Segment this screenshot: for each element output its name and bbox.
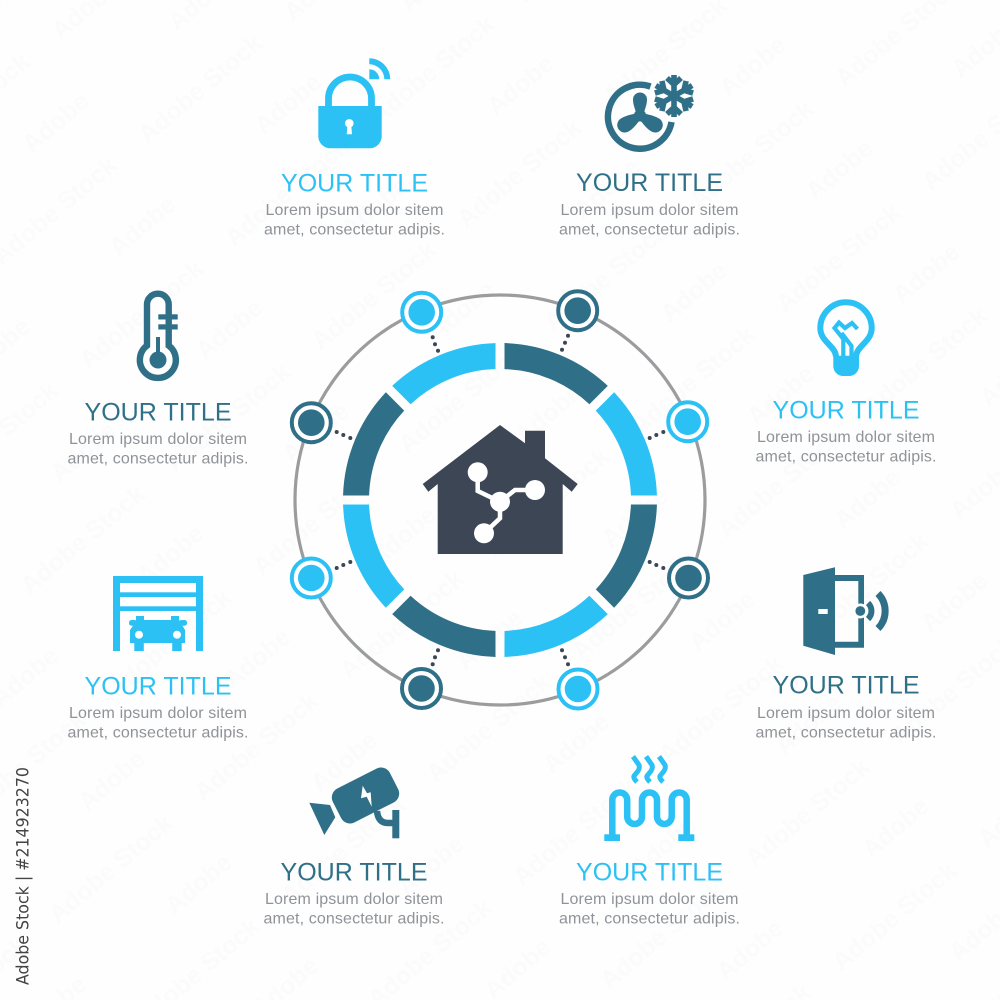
- icon: radiator with steam: [604, 756, 694, 841]
- icon: security camera: [309, 764, 403, 838]
- text: block 7: [264, 858, 444, 928]
- icon: central smart house: [423, 425, 578, 554]
- text: block 6: YOUR TITLE: [772, 672, 920, 700]
- icon: thermometer: [140, 294, 178, 378]
- text: block 2: [559, 169, 740, 238]
- text: block 4: [756, 396, 936, 466]
- text: block 6: amet, consectetur adipis.: [756, 724, 936, 742]
- text: block 8: [559, 858, 740, 928]
- text: block 8: amet, consectetur adipis.: [559, 910, 740, 928]
- text: block 1: amet, consectetur adipis.: [264, 222, 445, 238]
- text: block 7: YOUR TITLE: [280, 858, 428, 886]
- text: block 3: [68, 398, 248, 468]
- outer ring: [295, 295, 705, 705]
- connector dots: [335, 334, 665, 666]
- icon: smart lock: [318, 58, 390, 148]
- text: block 1: YOUR TITLE: [281, 170, 428, 198]
- text: block 1: Lorem ipsum dolor sitem: [266, 202, 444, 219]
- text: block 5: amet, consectetur adipis.: [68, 724, 248, 742]
- text: block 5: YOUR TITLE: [84, 672, 232, 700]
- text: block 6: Lorem ipsum dolor sitem: [757, 705, 935, 722]
- icon: light bulb: [820, 302, 872, 376]
- icon: fan and snowflake: [608, 75, 696, 149]
- text: block 5: [68, 672, 248, 742]
- text: block 2: YOUR TITLE: [576, 169, 723, 197]
- ring nodes: [292, 291, 708, 708]
- segmented ring: [313, 313, 687, 687]
- text: block 3: YOUR TITLE: [84, 398, 232, 426]
- text: block 4: YOUR TITLE: [772, 396, 920, 424]
- text: block 1: [264, 170, 445, 238]
- stock credit: Adobe Stock | #214923270: [14, 767, 32, 985]
- text: block 6: [756, 672, 936, 742]
- text: block 7: Lorem ipsum dolor sitem: [265, 891, 443, 908]
- text: block 4: Lorem ipsum dolor sitem: [757, 429, 935, 446]
- text: block 8: YOUR TITLE: [576, 858, 723, 886]
- text: block 5: Lorem ipsum dolor sitem: [69, 705, 247, 722]
- icon: door sensor: [803, 567, 885, 655]
- text: block 4: amet, consectetur adipis.: [756, 448, 936, 466]
- text: block 7: amet, consectetur adipis.: [264, 910, 444, 928]
- text: block 8: Lorem ipsum dolor sitem: [560, 891, 738, 908]
- text: block 2: amet, consectetur adipis.: [559, 222, 740, 238]
- icon: garage with car: [113, 576, 203, 651]
- text: block 3: Lorem ipsum dolor sitem: [69, 431, 247, 448]
- text: block 2: Lorem ipsum dolor sitem: [560, 202, 738, 219]
- text: block 3: amet, consectetur adipis.: [68, 450, 248, 468]
